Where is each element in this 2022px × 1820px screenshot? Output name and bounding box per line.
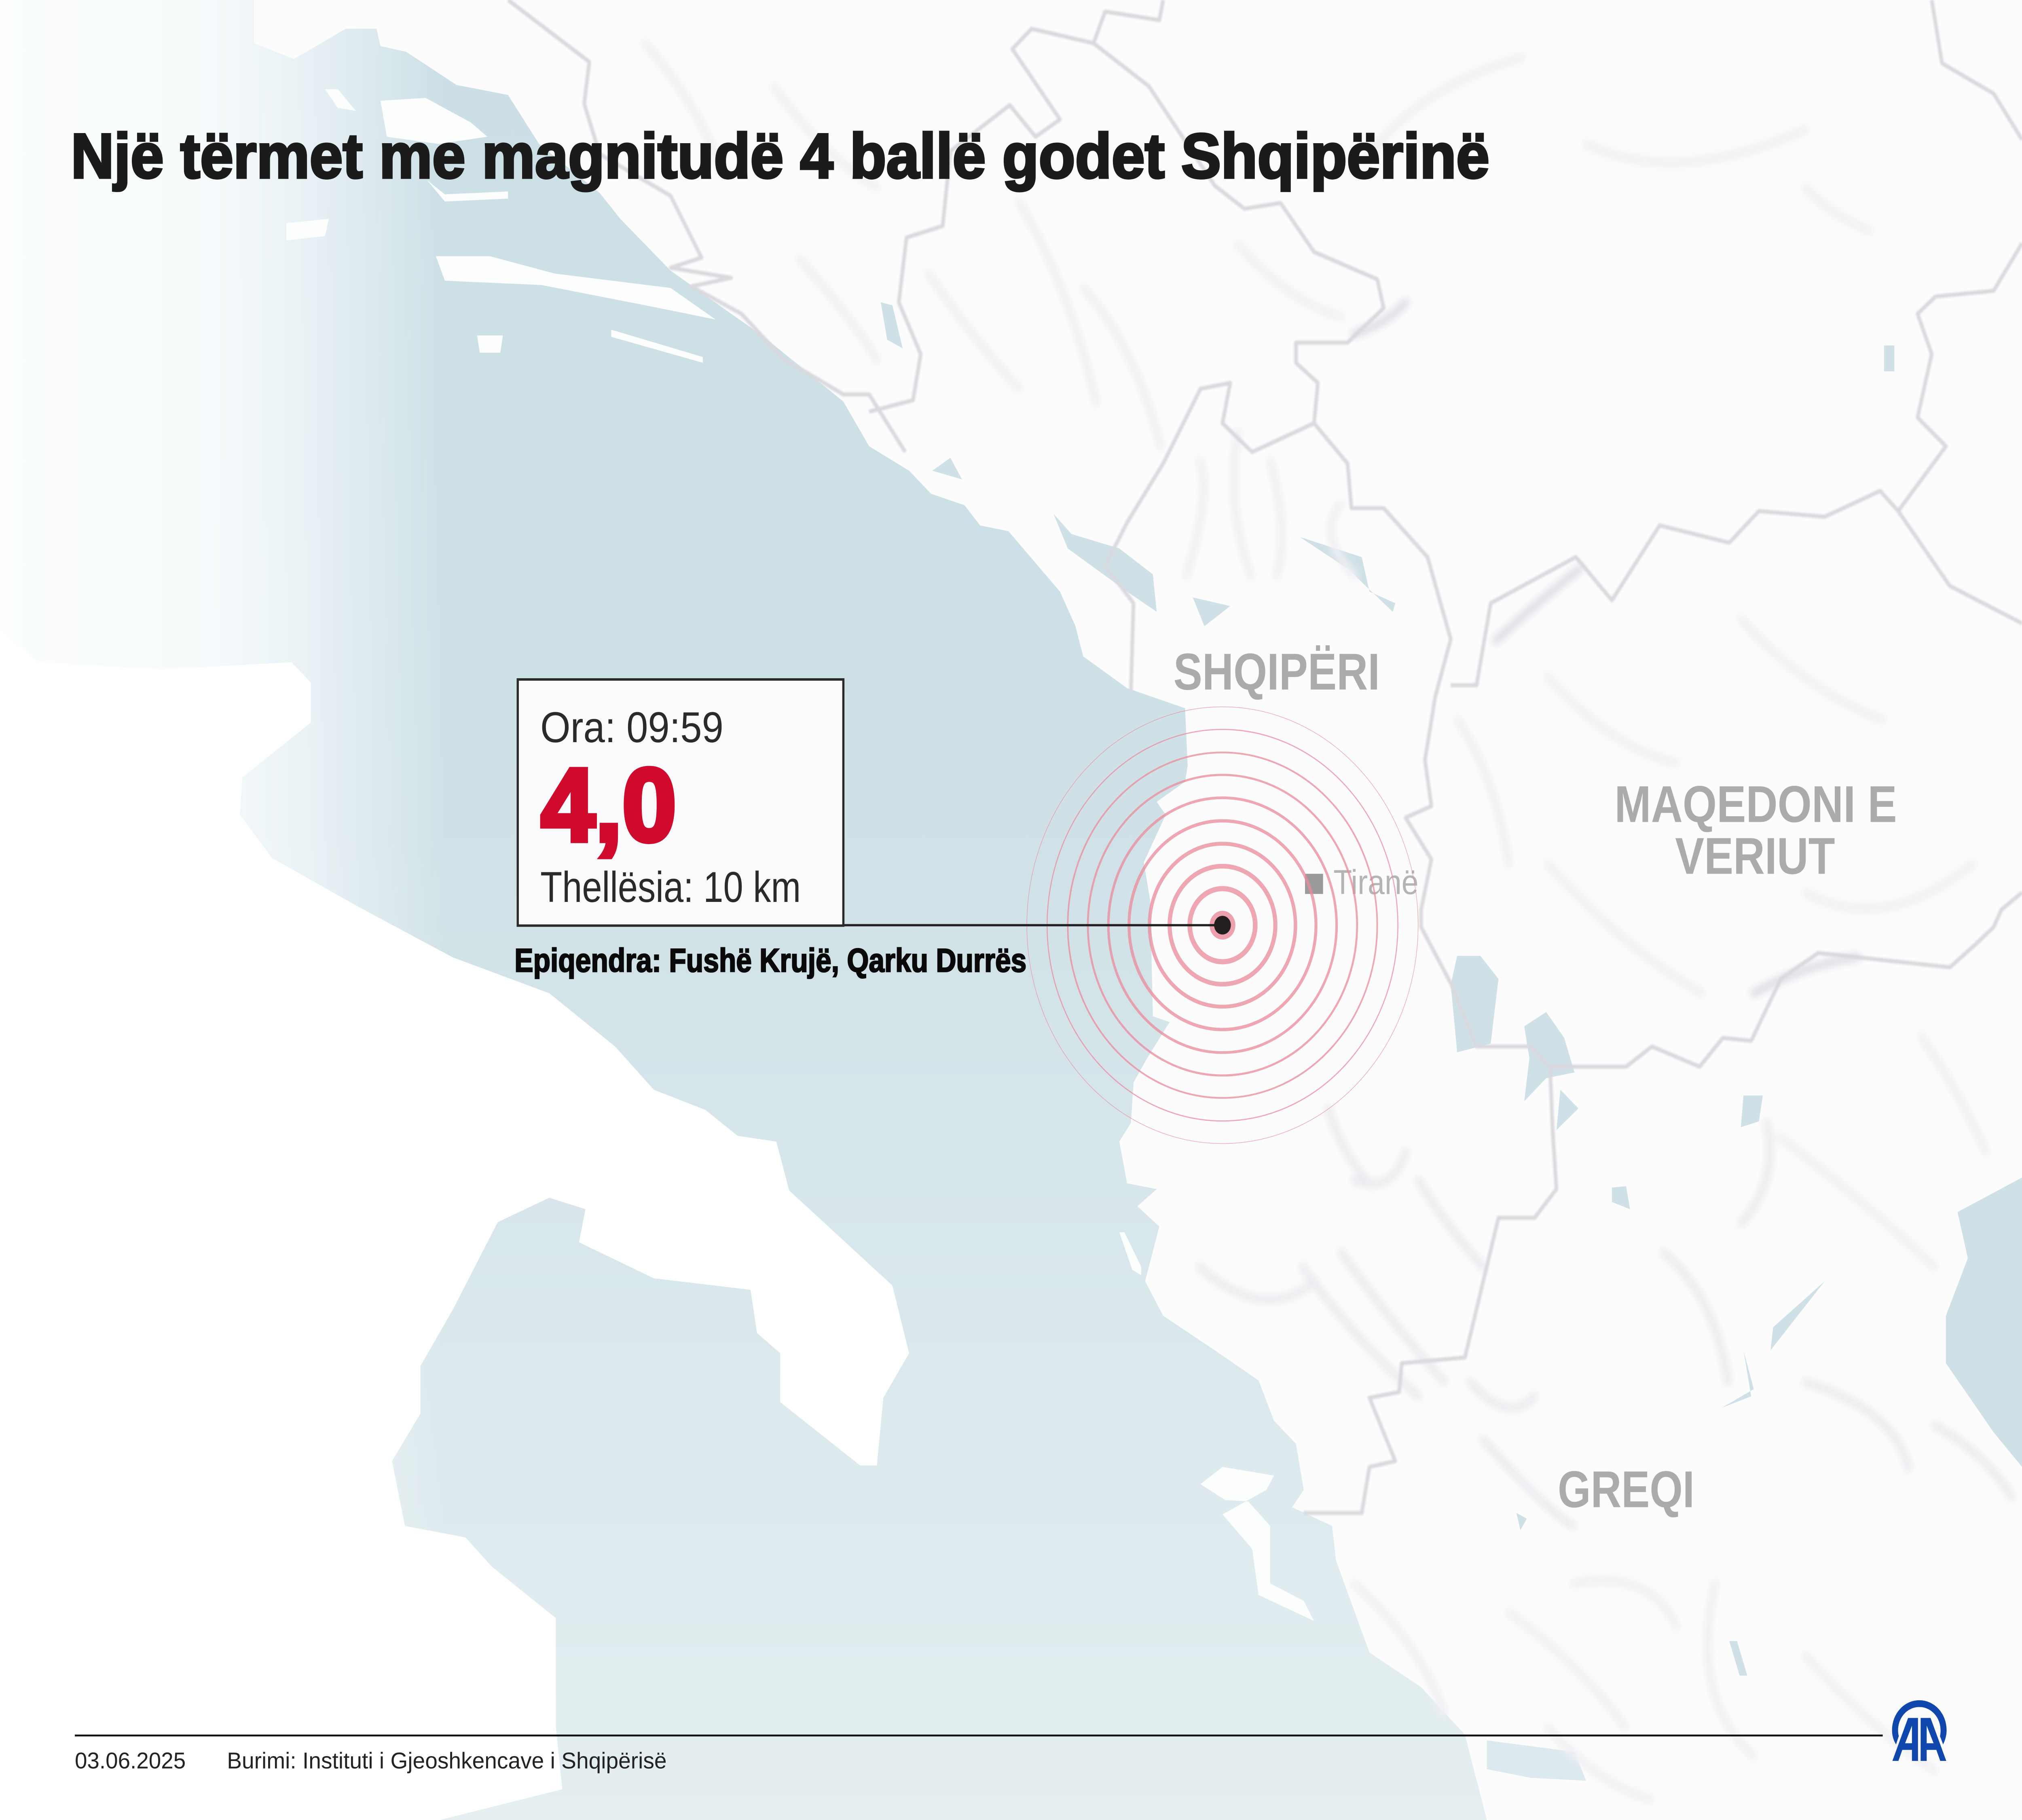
footer rule bbox=[75, 1735, 1883, 1736]
leader line bbox=[843, 925, 1223, 926]
label: Shqipëri: SHQIPËRI bbox=[1174, 643, 1380, 700]
epicentre dot bbox=[1214, 916, 1231, 935]
earthquake concentric rings bbox=[1027, 707, 1418, 1143]
label: Greqi: GREQI bbox=[1558, 1460, 1694, 1518]
label: Maqedoni e Veriut: VERIUT bbox=[1675, 827, 1835, 885]
epicentre caption: Epiqendra: Fushë Krujë, Qarku Durrës bbox=[514, 942, 1026, 979]
label: Maqedoni e Veriut bbox=[1614, 775, 1897, 885]
terrain shading bbox=[645, 43, 2011, 1799]
label: Maqedoni e Veriut: MAQEDONI E bbox=[1614, 775, 1897, 833]
info box bbox=[518, 679, 843, 926]
footer date: 03.06.2025 bbox=[75, 1748, 186, 1773]
time: Ora: 09:59 bbox=[540, 703, 723, 751]
footer source: Burimi: Instituti i Gjeoshkencave i Shqipërisë bbox=[227, 1748, 667, 1773]
city marker: Tiranë: Tiranë bbox=[1333, 863, 1419, 902]
islands bbox=[286, 89, 1314, 1621]
lakes, bays and Aegean bbox=[881, 302, 2022, 1781]
left fade over sea bbox=[0, 0, 445, 1820]
magnitude: 4,0 bbox=[541, 747, 677, 863]
icon: AA logo bbox=[1892, 1700, 1947, 1761]
title: Një tërmet me magnitudë 4 ballë godet Shqipërinë bbox=[71, 120, 1489, 191]
land: Italy bbox=[0, 631, 909, 1820]
country borders bbox=[508, 0, 2022, 1513]
depth: Thellësia: 10 km bbox=[540, 863, 801, 911]
country labels bbox=[1174, 643, 1897, 1518]
